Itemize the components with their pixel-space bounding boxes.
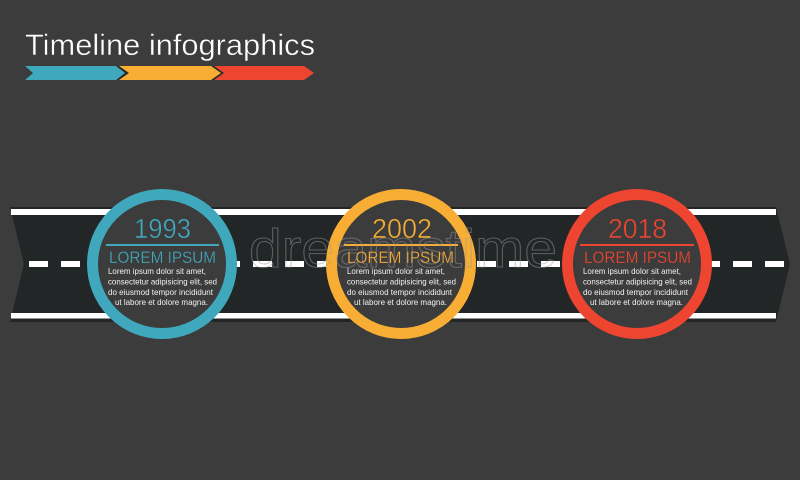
body text: ut labore et dolore magna.: [590, 297, 683, 307]
body text: [108, 266, 217, 307]
body text: Lorem ipsum dolor sit amet,: [108, 266, 206, 276]
year 2002: 2002: [372, 213, 432, 244]
body text: [583, 266, 692, 307]
heading: LOREM IPSUM: [109, 249, 216, 267]
body text: Lorem ipsum dolor sit amet,: [347, 266, 445, 276]
year 1993: 1993: [134, 213, 191, 244]
milestone 2018: [568, 194, 706, 334]
body text: do eiusmod tempor incididunt: [347, 287, 453, 297]
watermark: dreamstime: [249, 219, 557, 279]
body text: do eiusmod tempor incididunt: [108, 287, 214, 297]
road: [10, 207, 790, 322]
title: Timeline infographics: [25, 29, 315, 62]
body text: consectetur adipisicing elit, sed: [108, 276, 217, 286]
year 2018: 2018: [608, 213, 667, 244]
body text: consectetur adipisicing elit, sed: [347, 276, 456, 286]
body text: Lorem ipsum dolor sit amet,: [583, 266, 681, 276]
body text: ut labore et dolore magna.: [115, 297, 208, 307]
body text: ut labore et dolore magna.: [354, 297, 447, 307]
body text: [347, 266, 456, 307]
heading: LOREM IPSUM: [584, 249, 691, 267]
title arrows: three coloured chevrons: [25, 66, 314, 80]
body text: do eiusmod tempor incididunt: [583, 287, 689, 297]
milestone 1993: [92, 194, 232, 334]
body text: consectetur adipisicing elit, sed: [583, 276, 692, 286]
milestone 2002: [332, 194, 470, 334]
heading: LOREM IPSUM: [347, 249, 454, 267]
